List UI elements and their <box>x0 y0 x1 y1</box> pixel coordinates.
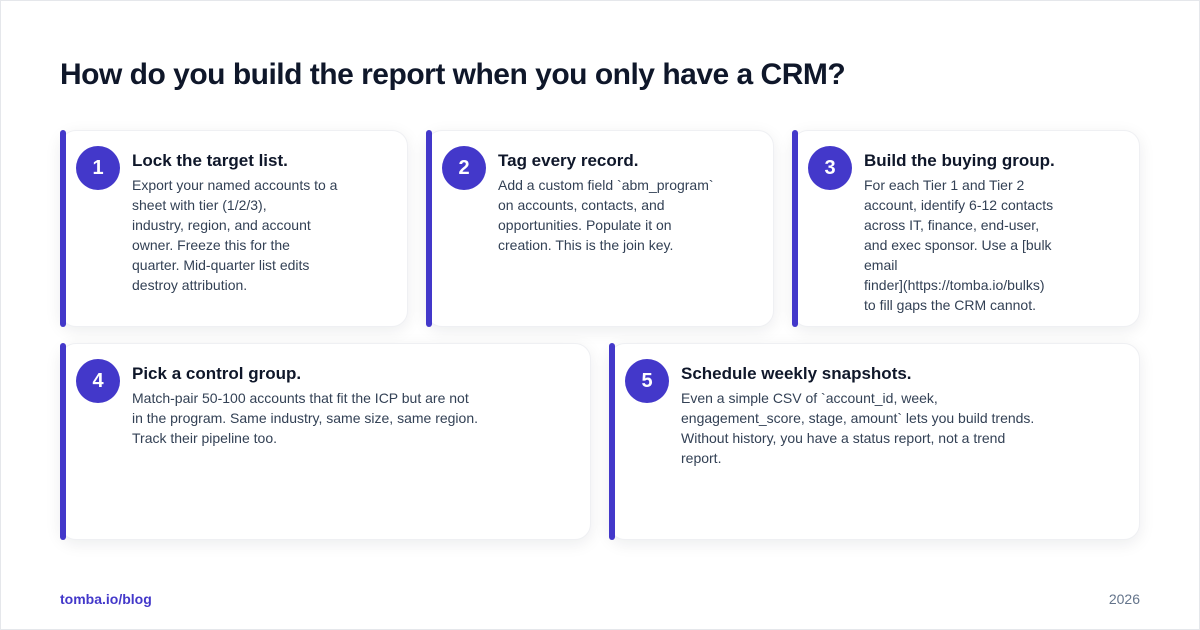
step 5 accent bar <box>609 343 615 540</box>
step 3 text: across IT, finance, end-user, <box>864 217 1039 233</box>
step 3 number: 3 <box>824 157 836 179</box>
title: How do you build the report when you only have a CRM? <box>60 58 845 91</box>
step 2 accent bar <box>426 130 432 327</box>
step 4 text: Track their pipeline too. <box>132 430 277 446</box>
step 1 text: sheet with tier (1/2/3), <box>132 197 267 213</box>
panel: step 1 <box>60 130 408 327</box>
step 3 text: email <box>864 257 897 273</box>
footer year: 2026 <box>1109 591 1140 607</box>
step 5 number <box>625 359 669 403</box>
step 4 number: 4 <box>92 370 104 392</box>
step 3 text <box>864 177 1053 313</box>
step 1 accent bar <box>60 130 66 327</box>
step 1 text <box>132 177 338 293</box>
step 1 text: destroy attribution. <box>132 277 247 293</box>
step 2 text <box>498 177 714 253</box>
step 1 text: industry, region, and account <box>132 217 311 233</box>
step 2 number <box>442 146 486 190</box>
step 1 text: quarter. Mid-quarter list edits <box>132 257 309 273</box>
step 3 accent bar <box>792 130 798 327</box>
step 3 text: and exec sponsor. Use a [bulk <box>864 237 1052 253</box>
step 4 heading: Pick a control group. <box>132 364 301 383</box>
step 5 number: 5 <box>641 370 653 392</box>
panel: step 5 <box>609 343 1140 540</box>
step 1 number: 1 <box>92 157 104 179</box>
step 2 heading: Tag every record. <box>498 151 638 170</box>
step 4 number <box>76 359 120 403</box>
panel: step 3 <box>792 130 1140 327</box>
step 2 text: on accounts, contacts, and <box>498 197 665 213</box>
footer link: tomba.io/blog <box>60 591 152 607</box>
step 1 number <box>76 146 120 190</box>
step 3 text: For each Tier 1 and Tier 2 <box>864 177 1024 193</box>
step 2 text: creation. This is the join key. <box>498 237 673 253</box>
step 3 text: finder](https://tomba.io/bulks) <box>864 277 1045 293</box>
step 5 text: engagement_score, stage, amount` lets you build trends. <box>681 410 1034 426</box>
step 2 number: 2 <box>458 157 470 179</box>
step 4 text <box>132 390 478 446</box>
step 3 text: account, identify 6-12 contacts <box>864 197 1053 213</box>
step 5 text: report. <box>681 450 721 466</box>
step 5 text: Without history, you have a status report, not a trend <box>681 430 1005 446</box>
step 2 text: Add a custom field `abm_program` <box>498 177 714 193</box>
step 1 heading: Lock the target list. <box>132 151 288 170</box>
step 5 text: Even a simple CSV of `account_id, week, <box>681 390 938 406</box>
step 2 text: opportunities. Populate it on <box>498 217 672 233</box>
step 4 text: in the program. Same industry, same size, same region. <box>132 410 478 426</box>
step 5 text <box>681 390 1034 466</box>
step 4 text: Match-pair 50-100 accounts that fit the ICP but are not <box>132 390 469 406</box>
panel: step 2 <box>426 130 774 327</box>
panel: step 4 <box>60 343 591 540</box>
step 3 heading: Build the buying group. <box>864 151 1055 170</box>
step 5 heading: Schedule weekly snapshots. <box>681 364 912 383</box>
step 3 number <box>808 146 852 190</box>
step 1 text: owner. Freeze this for the <box>132 237 290 253</box>
step 4 accent bar <box>60 343 66 540</box>
step 3 text: to fill gaps the CRM cannot. <box>864 297 1036 313</box>
step 1 text: Export your named accounts to a <box>132 177 337 193</box>
